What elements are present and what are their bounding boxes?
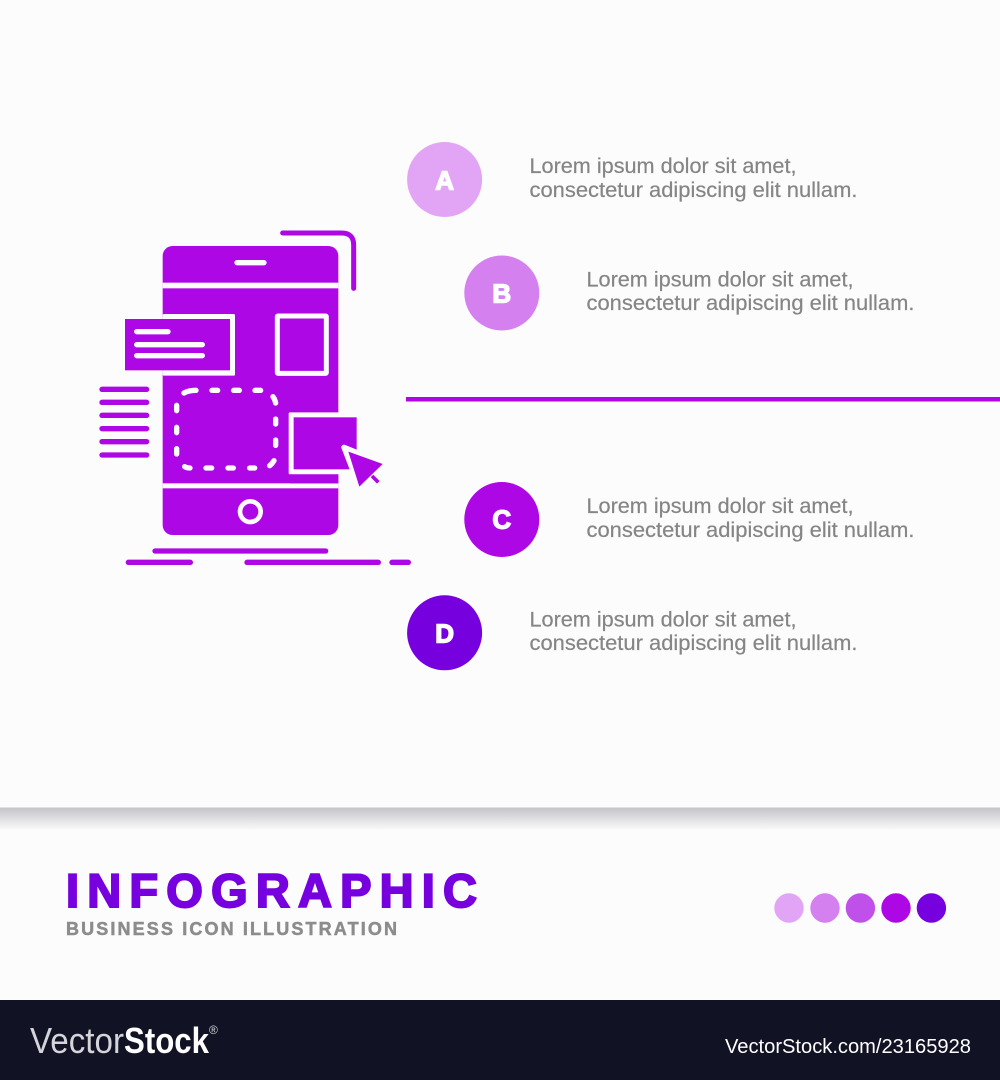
step D	[407, 595, 858, 670]
icon: ground lines	[128, 551, 408, 562]
subtitle: BUSINESS ICON ILLUSTRATION	[66, 919, 397, 939]
text C: consectetur adipiscing elit nullam.	[586, 519, 914, 542]
text D: consectetur adipiscing elit nullam.	[530, 632, 858, 655]
footer logo: Vector	[30, 1020, 124, 1061]
title: INFOGRAPHIC	[66, 864, 485, 917]
badge C	[464, 482, 539, 557]
badge D	[407, 595, 482, 670]
text B: consectetur adipiscing elit nullam.	[586, 292, 914, 315]
icon: dragged box	[289, 412, 357, 474]
step B	[464, 256, 914, 330]
footer bar	[0, 1000, 1000, 1080]
icon: text card	[125, 314, 235, 376]
step A	[407, 142, 858, 217]
footer logo: ®	[209, 1023, 218, 1037]
text D: Lorem ipsum dolor sit amet,	[530, 608, 796, 631]
band shadow	[0, 808, 1000, 830]
divider line	[406, 397, 1000, 402]
icon: phone body	[163, 246, 338, 535]
icon: corner bracket	[283, 233, 354, 288]
text C	[586, 495, 914, 542]
badge B: B	[492, 278, 511, 308]
palette dots	[774, 893, 946, 923]
text B	[586, 268, 914, 315]
text A	[530, 155, 858, 202]
icon: side text lines	[102, 389, 147, 455]
badge B	[464, 256, 539, 330]
text B: Lorem ipsum dolor sit amet,	[586, 268, 854, 291]
footer image id: VectorStock.com/23165928	[725, 1036, 971, 1058]
badge D: D	[435, 618, 454, 648]
icon: cursor arrow	[344, 447, 383, 487]
text C: Lorem ipsum dolor sit amet,	[586, 495, 854, 518]
text D	[530, 608, 858, 655]
badge A	[407, 142, 482, 217]
text A: consectetur adipiscing elit nullam.	[530, 179, 858, 202]
icon: phone edge below box	[290, 474, 338, 483]
badge A: A	[435, 166, 454, 196]
footer logo: Stock	[124, 1020, 210, 1061]
illustration: mobile drag and drop icon	[102, 233, 408, 562]
footer logo	[30, 1020, 218, 1061]
step C	[464, 482, 914, 557]
icon: dashed drop zone	[177, 390, 276, 468]
badge C: C	[492, 504, 511, 534]
icon: image card	[277, 316, 326, 373]
text A: Lorem ipsum dolor sit amet,	[530, 155, 796, 178]
